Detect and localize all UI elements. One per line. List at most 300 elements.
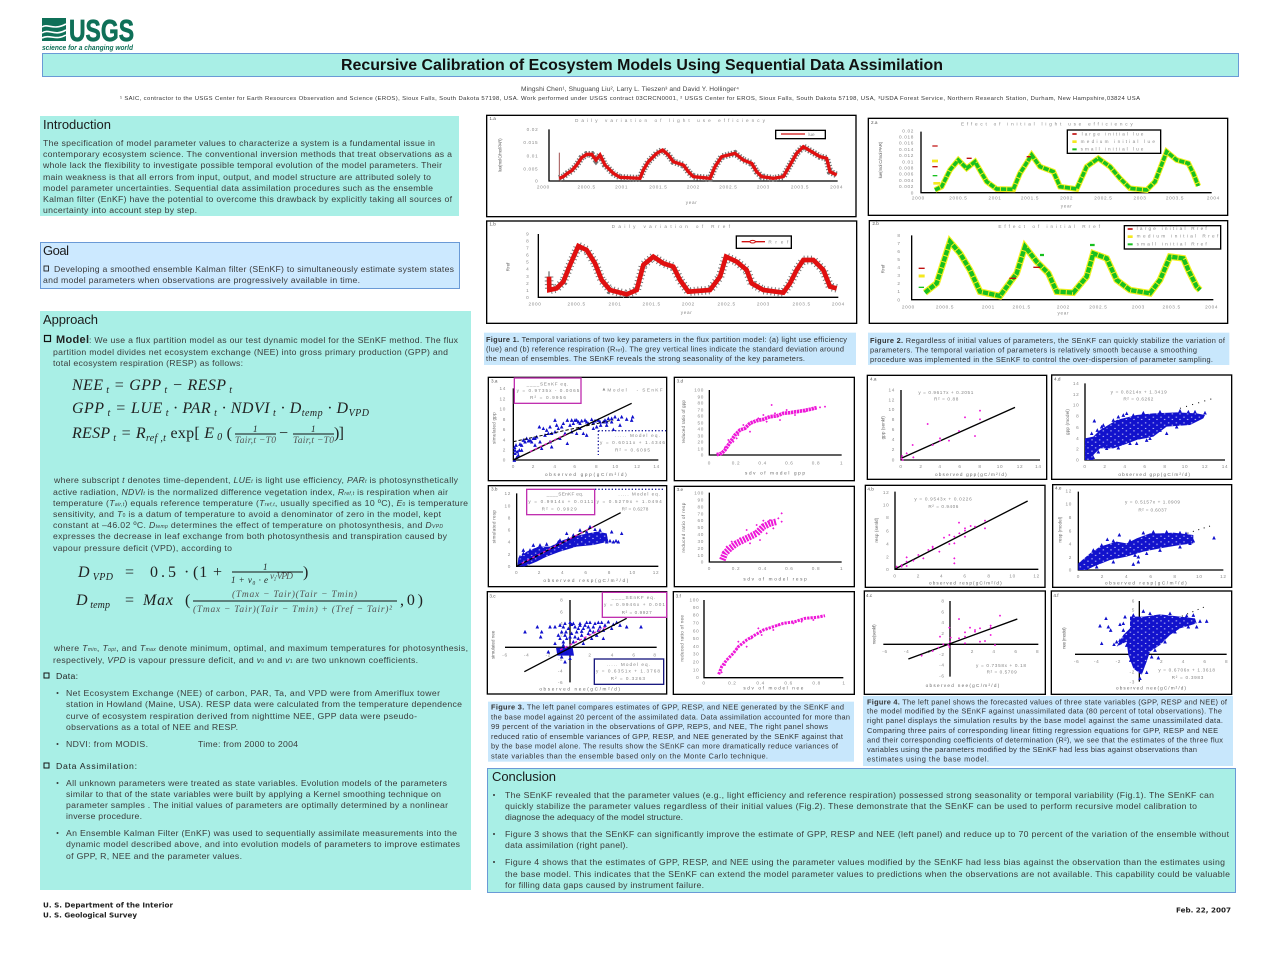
chart: 2.a effect of initial light use efficiency: 0.01 <box>902 159 914 164</box>
formula: flux partition equations: GPP <box>72 400 104 417</box>
footer: agency names: U. S. Geological Survey <box>43 910 137 920</box>
chart: 3.e reduced ratio of resp: 0.2 <box>732 566 740 571</box>
panel: approach <box>40 311 471 890</box>
chart: 3.a simulated vs observed gpp: simulated gpp <box>492 412 497 444</box>
chart: 1.b daily variation of Rref: 2 <box>526 281 529 286</box>
chart: 3.a simulated vs observed gpp <box>488 377 667 481</box>
text block: introduction body: whole lack the flexibility to investigate possible temporal evolution of the model parameters. Their <box>42 160 442 170</box>
chart: 3.a simulated vs observed gpp: ▲ <box>602 387 606 392</box>
chart: 3.b simulated vs observed resp: 10 <box>629 570 636 575</box>
chart: 3.a simulated vs observed gpp: 6 <box>573 464 577 469</box>
formula: D_VPD and D_temp: temp <box>88 600 110 611</box>
chart: 3.a simulated vs observed gpp: 14 <box>499 386 506 391</box>
chart: 4.c nee senkf vs observed: -2 <box>939 652 945 657</box>
chart: 3.f reduced ratio of nee: 70 <box>693 621 699 626</box>
chart: 4.d gpp model vs observed: observed gpp(gC/m²/d) <box>1118 472 1190 477</box>
formula: D_VPD and D_temp: 1 <box>263 562 268 572</box>
chart: 4.c nee senkf vs observed: 8 <box>941 599 945 604</box>
chart: 2.b effect of initial Rref: Effect of initial Rref <box>998 224 1101 229</box>
chart: 4.d gpp model vs observed: 4.d <box>1054 376 1061 381</box>
chart: 4.c nee senkf vs observed: -4 <box>939 663 945 668</box>
text block: data assimilation: All unknown parameters were treated as state variables. Evolution models of the parameters <box>66 778 448 788</box>
chart: 1.a daily variation of light use efficiency: 0.02 <box>527 127 538 132</box>
caption: figure 4: Comparing three pairs of corresponding linear fitting regression equations for GPP, RESP and NEE <box>867 726 1218 735</box>
chart: 4.b resp senkf vs observed: 4 <box>886 542 889 547</box>
chart: 3.f reduced ratio of nee: 0.6 <box>784 680 793 685</box>
formula: flux partition equations: − <box>279 425 288 442</box>
text block: introduction body: contemporary ecosystem science. The conventional inversion methods that treat observations as a <box>43 149 452 159</box>
chart: 1.a daily variation of light use efficiency: 0.015 <box>523 140 538 145</box>
chart: 3.a simulated vs observed gpp: R² = 0.6095 <box>615 447 650 452</box>
text block: conclusion bullets: the base model. This indicates that the SEnKF can extend the model parameter values to predictions when the observations are not available. This capability could be valuable <box>505 869 1230 879</box>
formula: D_VPD and D_temp: 1 + v₀ · e <box>231 575 268 585</box>
chart: 4.d gpp model vs observed: R² = 0.6262 <box>1123 397 1154 402</box>
chart: 4.b resp senkf vs observed: 10 <box>883 503 889 508</box>
chart: 1.b daily variation of Rref: 2001.5 <box>643 302 661 307</box>
caption: figure 3: state variables than the ensemble based only on the Monte Carlo technique. <box>491 751 768 760</box>
chart: 2.a effect of initial light use efficiency: 2000 <box>912 195 925 200</box>
chart: 2.a effect of initial light use efficiency: lue(mol C/mol PAR) <box>878 141 883 178</box>
chart: 2.a effect of initial light use efficiency: 0.02 <box>902 128 914 133</box>
formula: flux partition equations: t <box>105 408 111 419</box>
chart: 3.b simulated vs observed resp: 2 <box>508 552 511 557</box>
chart: 4.f nee model vs observed: -4 <box>1094 659 1099 664</box>
chart: 4.e resp model vs observed: 2 <box>1069 555 1072 560</box>
chart: 3.c simulated vs observed nee: -4 <box>558 669 563 674</box>
chart: 4.b resp senkf vs observed: 6 <box>886 528 889 533</box>
chart: 3.e reduced ratio of resp: sdv of model resp <box>743 577 807 582</box>
chart: 3.d reduced ratio of gpp: 0.2 <box>732 461 740 466</box>
chart: 1.a daily variation of light use efficiency: 2003.5 <box>791 185 809 190</box>
chart: 4.a gpp senkf vs observed: 14 <box>1035 464 1042 469</box>
chart: 1.a daily variation of light use efficiency: 2000.5 <box>578 185 596 190</box>
caption: figure 2 <box>868 333 1229 365</box>
formula: flux partition equations: t <box>110 433 116 444</box>
chart: 1.b daily variation of Rref: Rref <box>768 239 789 244</box>
caption: figure 2: Figure 2. Regardless of initial values of parameters, the SEnKF can quickly stabilize the variation of <box>870 336 1226 345</box>
chart: 4.d gpp model vs observed: 4 <box>1076 436 1079 441</box>
caption: figure 1: (lue) and (b) reference respiration (Rref). The grey vertical lines indicate the standard deviation around <box>486 344 844 353</box>
chart: 4.f nee model vs observed <box>1051 591 1232 694</box>
chart: 4.c nee senkf vs observed: -4 <box>904 649 909 654</box>
chart: 4.a gpp senkf vs observed: 8 <box>892 417 895 422</box>
chart: 4.d gpp model vs observed: 14 <box>1222 464 1228 469</box>
chart: 1.b daily variation of Rref: 2001 <box>608 302 622 307</box>
formula: D_VPD and D_temp: = <box>125 564 134 581</box>
text block: data: observations as a total of NEE and RESP. <box>66 722 238 732</box>
chart: 1.a daily variation of light use efficiency: Daily variation of light use efficiency <box>575 118 766 123</box>
text block: data assimilation: parameter samples . The initial values of parameters are optimally determined by a nonlinear <box>66 800 448 810</box>
chart: 2.a effect of initial light use efficiency: small initial lue <box>1081 147 1144 152</box>
text block: data: Time: from 2000 to 2004 <box>198 739 298 749</box>
chart: 2.a effect of initial light use efficiency: 0.002 <box>899 184 914 189</box>
chart: 4.a gpp senkf vs observed: 10 <box>888 407 895 412</box>
chart: 3.a simulated vs observed gpp: 4 <box>503 437 506 442</box>
chart: 3.a simulated vs observed gpp: 12 <box>634 464 641 469</box>
chart: 3.a simulated vs observed gpp: 2 <box>532 464 535 469</box>
formula: D_VPD and D_temp: (Tmax − Tair)(Tair − Tmin) <box>232 589 357 600</box>
panel: goal <box>40 242 460 288</box>
title bar: Recursive Calibration of Ecosystem Models Using Sequential Data Assimilation <box>341 57 943 74</box>
text block: introduction body: Kalman filter (EnKF) have the potential to overcome this drawback by explicitly taking all sources of <box>43 194 453 204</box>
chart: 4.f nee model vs observed: 4.f <box>1053 593 1059 598</box>
chart: 3.e reduced ratio of resp: 90 <box>697 497 704 502</box>
chart: 4.e resp model vs observed: 12 <box>1065 489 1072 494</box>
chart: 3.b simulated vs observed resp: R² = 0.9929 <box>542 506 577 511</box>
chart: 4.a gpp senkf vs observed: observed gpp(gC/m²/d) <box>935 472 1007 477</box>
formula: flux partition equations: t <box>226 385 232 396</box>
chart: 3.a simulated vs observed gpp: 10 <box>499 407 506 412</box>
footer: date: Feb. 22, 2007 <box>1176 906 1231 914</box>
chart: 3.e reduced ratio of resp: 20 <box>697 546 704 551</box>
chart: 3.c simulated vs observed nee: 6 <box>560 609 563 614</box>
chart: 4.f nee model vs observed: observed nee(gC/m²/d) <box>1116 686 1186 691</box>
chart: 3.e reduced ratio of resp: 60 <box>697 518 704 523</box>
chart: 3.c simulated vs observed nee: 2 <box>560 633 563 638</box>
chart: 1.a daily variation of light use efficiency: 0.01 <box>527 153 538 158</box>
chart: 1.a daily variation of light use efficiency: year <box>686 200 698 205</box>
formula: D_VPD and D_temp <box>75 562 423 615</box>
chart: 2.a effect of initial light use efficiency: 2002 <box>1060 195 1073 200</box>
chart: 3.b simulated vs observed resp: 0 <box>515 570 518 575</box>
caption: figure 4: right panel displays the simulation results by the base model against the same unassimilated data. <box>867 716 1223 725</box>
chart: 4.d gpp model vs observed: gpp (model) <box>1065 409 1070 435</box>
chart: 4.f nee model vs observed: 8 <box>1225 659 1228 664</box>
chart: 1.b daily variation of Rref: 2002 <box>682 302 695 307</box>
chart: 4.f nee model vs observed: 5 <box>1132 608 1135 613</box>
chart: 1.a daily variation of light use efficiency: 2002 <box>687 185 700 190</box>
chart: 4.d gpp model vs observed: 14 <box>1073 381 1079 386</box>
text block: conclusion bullets: Figure 4 shows that the estimates of GPP, RESP, and NEE using the parameter values modified by the SEnKF had less bias against the observation than the estimates using <box>505 857 1225 867</box>
chart: 3.a simulated vs observed gpp: 4 <box>553 464 557 469</box>
chart: 3.b simulated vs observed resp: 10 <box>504 503 511 508</box>
chart: 3.c simulated vs observed nee: y = 0.9946x + 0.001 <box>604 602 665 607</box>
chart: 3.c simulated vs observed nee: 8 <box>560 598 563 603</box>
chart: 4.a gpp senkf vs observed <box>867 375 1047 479</box>
chart: 3.b simulated vs observed resp: y = 0.9914x + 0.0111 <box>528 499 594 504</box>
chart: 3.c simulated vs observed nee: 2 <box>588 652 592 657</box>
chart: 3.b simulated vs observed resp: ..... Model eq. <box>618 491 660 496</box>
chart: 3.b simulated vs observed resp: 0 <box>508 564 511 569</box>
chart: 3.c simulated vs observed nee: 8 <box>653 652 657 657</box>
chart: 4.d gpp model vs observed <box>1052 375 1232 479</box>
chart: 4.a gpp senkf vs observed: 10 <box>997 464 1003 469</box>
chart: 4.e resp model vs observed: 4 <box>1125 574 1128 579</box>
heading: approach: Approach <box>43 312 98 327</box>
chart: 1.b daily variation of Rref: 0 <box>526 295 529 300</box>
chart: 4.b resp senkf vs observed: 2 <box>917 573 920 578</box>
text block: introduction body: main weakness is that all errors from input, output, and model structure are attributed solely to <box>43 172 431 182</box>
chart: 1.a daily variation of light use efficiency: 0 <box>535 179 538 184</box>
text block: model description: : We use a flux partition model as our test dynamic model for the SEnKF method. The flux <box>89 335 459 345</box>
chart: 1.a daily variation of light use efficiency <box>487 115 856 217</box>
text block: data: station in Howland (Maine, USA). RESP data were calculated from the temperature dependence <box>66 699 462 709</box>
chart: 3.f reduced ratio of nee: 0 <box>702 680 706 685</box>
chart: 3.b simulated vs observed resp: 12 <box>653 570 659 575</box>
chart: 3.c simulated vs observed nee: 3.c <box>489 593 496 598</box>
chart: 1.a daily variation of light use efficiency: lue(mol C/mol PAR) <box>497 138 502 172</box>
formula: flux partition equations: RESP <box>72 425 110 442</box>
text block: data assimilation: An Ensemble Kalman Filter (EnKF) was used to sequentially assimilate measurements into the <box>66 828 457 838</box>
text block: variable definitions <box>53 475 468 553</box>
chart: 3.a simulated vs observed gpp: 10 <box>612 464 619 469</box>
formula: D_VPD and D_temp: · <box>184 564 189 581</box>
caption: figure 2: procedure was implemented in the SEnKF to control the over-dispersion of parameter sampling. <box>870 355 1213 364</box>
caption: figure 4: and their corresponding coefficients of determination (R²), we see that the estimates of the three flux <box>867 735 1223 744</box>
chart: 3.b simulated vs observed resp: simulated resp <box>492 510 497 543</box>
chart: 4.b resp senkf vs observed: 8 <box>886 515 889 520</box>
formula: flux partition equations: − RESP <box>168 377 226 394</box>
chart: 3.e reduced ratio of resp <box>674 486 854 587</box>
formula: flux partition equations: t <box>270 408 276 419</box>
formula: flux partition equations: VPD <box>349 408 370 419</box>
caption: figure 2: parameters. The temporal variation of parameters is relatively smooth because a smoothing <box>870 345 1197 354</box>
chart: 2.b effect of initial Rref: 0 <box>897 297 901 302</box>
formula: flux partition equations: · NDVI <box>217 400 270 417</box>
chart: 4.f nee model vs observed: 2 <box>1132 634 1135 639</box>
chart: 4.f nee model vs observed: R² = 0.3983 <box>1172 675 1204 680</box>
chart: 2.a effect of initial light use efficiency: 0.016 <box>899 141 914 146</box>
text block: data <box>44 671 462 749</box>
chart: 2.b effect of initial Rref: year <box>1057 310 1069 315</box>
chart: 2.b effect of initial Rref: 4 <box>897 265 901 270</box>
formula: flux partition equations: = R <box>116 425 146 442</box>
chart: 3.d reduced ratio of gpp: 0 <box>701 453 704 458</box>
chart: 3.d reduced ratio of gpp: sdv of model gpp <box>745 471 805 476</box>
chart: 4.e resp model vs observed: 0 <box>1077 574 1080 579</box>
chart: 2.b effect of initial Rref: 2 <box>897 281 901 286</box>
formula: D_VPD and D_temp: D <box>78 564 90 581</box>
chart: 2.a effect of initial light use efficiency: 0.004 <box>899 178 914 183</box>
chart: 3.a simulated vs observed gpp: - SEnKF <box>637 387 663 392</box>
chart: 4.b resp senkf vs observed: observed resp(gC/m²/d) <box>929 580 1002 585</box>
chart: 3.c simulated vs observed nee: ____SEnKF eq. <box>611 595 655 600</box>
formula: flux partition equations: t <box>163 408 169 419</box>
chart: 4.a gpp senkf vs observed: gpp (senkf) <box>880 416 885 439</box>
chart: 3.e reduced ratio of resp: 70 <box>697 511 704 516</box>
chart: 4.b resp senkf vs observed: 0 <box>893 573 897 578</box>
chart: 2.b effect of initial Rref: 2003.5 <box>1163 304 1181 309</box>
chart: 4.e resp model vs observed: resp (model) <box>1058 516 1063 543</box>
chart: 4.e resp model vs observed: 4 <box>1069 542 1072 547</box>
text block: conclusion bullets <box>493 790 1230 890</box>
chart: 4.f nee model vs observed: -2 <box>1116 659 1121 664</box>
chart: 4.b resp senkf vs observed: 6 <box>963 573 967 578</box>
chart: 4.c nee senkf vs observed: 6 <box>941 609 945 614</box>
chart: 4.a gpp senkf vs observed: 0 <box>892 458 895 463</box>
chart: 4.b resp senkf vs observed: 0 <box>886 567 889 572</box>
chart: 1.b daily variation of Rref: 2000 <box>528 302 542 307</box>
formula: flux partition equations: 0 <box>214 432 222 443</box>
text block: goal body: and model parameters when observations are progressively available in time. <box>43 275 360 285</box>
title bar <box>42 54 1238 76</box>
chart: 2.b effect of initial Rref: 5 <box>897 257 901 262</box>
chart: 2.b effect of initial Rref: 2002 <box>1057 304 1070 309</box>
chart: 3.d reduced ratio of gpp: 80 <box>697 401 704 406</box>
chart: 4.b resp senkf vs observed: 4.b <box>867 486 874 491</box>
chart: 4.a gpp senkf vs observed: R² = 0.88 <box>934 397 959 402</box>
chart: 4.f nee model vs observed: -6 <box>1074 659 1079 664</box>
formula: flux partition equations: temp <box>302 408 323 419</box>
chart: 4.c nee senkf vs observed: -6 <box>939 673 945 678</box>
chart: 4.c nee senkf vs observed: 4 <box>941 620 945 625</box>
chart: 4.b resp senkf vs observed: y = 0.9543x + 0.0226 <box>914 497 972 502</box>
chart: 2.a effect of initial light use efficiency: 0.014 <box>899 147 914 152</box>
chart: 2.a effect of initial light use efficiency: year <box>1061 203 1073 208</box>
chart: 2.a effect of initial light use efficiency: Effect of initial light use efficiency <box>961 121 1133 126</box>
formula: D_VPD and D_temp: (1 + <box>193 564 222 581</box>
chart: 3.f reduced ratio of nee: 80 <box>693 613 699 618</box>
formula: flux partition equations <box>71 377 370 446</box>
chart: 1.a daily variation of light use efficiency: 2000 <box>537 185 550 190</box>
logo: USGS: science for a changing world <box>42 43 133 52</box>
chart: 1.b daily variation of Rref: 1.b <box>489 221 496 226</box>
chart: 3.a simulated vs observed gpp: observed gpp(gC/m²/d) <box>545 472 627 477</box>
text block: model description: total ecosystem respiration (RESP) as follows: <box>53 358 243 368</box>
chart: 4.b resp senkf vs observed: 12 <box>883 490 889 495</box>
chart: 3.a simulated vs observed gpp: 14 <box>653 464 660 469</box>
caption: figure 3: reduced ratio of ensemble variances of GPP, RESP, and NEE generated by the SEnKF against that <box>491 732 843 741</box>
chart: 3.f reduced ratio of nee: 90 <box>693 605 699 610</box>
chart: 4.d gpp model vs observed: 12 <box>1073 392 1079 397</box>
text block: coefficient definitions: where Tmin, Topt, and Tmax denote minimum, optimal, and maximum temperatures for photosynthesis, <box>53 643 468 653</box>
chart: 3.f reduced ratio of nee: 0 <box>696 675 699 680</box>
caption: figure 3: by the base model alone. The results show the SEnKF can more dramatically reduce variances of <box>491 741 839 750</box>
chart: 3.c simulated vs observed nee: 6 <box>632 652 636 657</box>
formula: flux partition equations: E <box>204 425 214 442</box>
chart: 4.a gpp senkf vs observed: 4 <box>892 437 895 442</box>
chart: 2.a effect of initial light use efficiency: 0 <box>911 190 914 195</box>
chart: 3.b simulated vs observed resp: 8 <box>608 570 611 575</box>
text block: coefficient definitions: respectively, VPD is vapour pressure deficit, and v0 and v1 are two unknown coefficients. <box>53 655 418 665</box>
chart: 2.a effect of initial light use efficiency: 2001 <box>988 195 1002 200</box>
chart: 4.d gpp model vs observed: 4 <box>1123 464 1127 469</box>
chart: 4.d gpp model vs observed: 10 <box>1182 464 1188 469</box>
chart: 3.f reduced ratio of nee <box>673 592 854 694</box>
text block: data assimilation: Data Assimilation: <box>56 761 137 771</box>
chart: 4.a gpp senkf vs observed: 4.a <box>870 377 877 382</box>
authors and affiliations <box>120 86 1140 102</box>
chart: 4.a gpp senkf vs observed: 2 <box>919 464 923 469</box>
caption: figure 1 <box>484 333 856 365</box>
chart: 3.e reduced ratio of resp: 0.4 <box>758 566 767 571</box>
chart: 1.b daily variation of Rref: Daily variation of Rref <box>612 224 731 229</box>
chart: 4.e resp model vs observed <box>1053 485 1232 587</box>
chart: 4.c nee senkf vs observed: 4.c <box>866 593 873 598</box>
chart: 4.d gpp model vs observed: 10 <box>1073 403 1079 408</box>
chart: 3.e reduced ratio of resp: 40 <box>697 532 704 537</box>
chart: 4.d gpp model vs observed: 8 <box>1076 414 1079 419</box>
chart: 1.b daily variation of Rref: 2004 <box>832 302 845 307</box>
formula: flux partition equations: t <box>162 385 167 396</box>
chart: 3.e reduced ratio of resp: 0.8 <box>812 566 820 571</box>
chart: 1.b daily variation of Rref: 9 <box>526 232 529 237</box>
chart: 2.b effect of initial Rref: Rref <box>881 264 886 273</box>
chart: 3.a simulated vs observed gpp: 0 <box>503 458 506 463</box>
formula: D_VPD and D_temp: D <box>76 592 88 609</box>
chart: 2.a effect of initial light use efficiency: 0.018 <box>899 135 914 140</box>
chart: 3.c simulated vs observed nee: R² = 0.3263 <box>611 676 645 681</box>
chart: 4.e resp model vs observed: 0 <box>1069 568 1072 573</box>
text block: conclusion bullets: quickly stabilize the parameter values regardless of their initial values (Fig.2). These demonstrate that the SEnKF can be used to perform recursive model calibration to <box>505 801 1197 811</box>
chart: 3.d reduced ratio of gpp: 70 <box>697 407 704 412</box>
chart: 3.d reduced ratio of gpp: 30 <box>697 433 704 438</box>
chart: 3.a simulated vs observed gpp: R² = 0.9956 <box>530 395 566 400</box>
chart: 3.a simulated vs observed gpp: y = 0.6011x + 1.4346 <box>600 440 665 445</box>
chart: 2.b effect of initial Rref: 2004 <box>1205 304 1218 309</box>
chart: 3.b simulated vs observed resp: 4 <box>561 570 564 575</box>
chart: 3.d reduced ratio of gpp: 50 <box>697 420 704 425</box>
chart: 4.e resp model vs observed: 4.e <box>1055 486 1062 491</box>
chart: 3.f reduced ratio of nee: reduced ratio of nee <box>679 615 684 662</box>
chart: 4.b resp senkf vs observed: resp (senkf) <box>874 517 879 543</box>
chart: 3.a simulated vs observed gpp: ____SEnKF eq. <box>526 381 568 386</box>
chart: 3.e reduced ratio of resp: 100 <box>694 490 704 495</box>
chart: 3.d reduced ratio of gpp: 1 <box>840 461 843 466</box>
chart: 3.a simulated vs observed gpp: 6 <box>503 427 506 432</box>
chart: 2.b effect of initial Rref: 2002.5 <box>1089 304 1107 309</box>
text block: introduction body: uncertainty into account step by step. <box>43 205 197 215</box>
chart: 4.a gpp senkf vs observed: 12 <box>888 398 895 403</box>
formula: flux partition equations: 1 <box>253 424 258 434</box>
formula: flux partition equations: · D <box>276 400 302 417</box>
chart: 1.a daily variation of light use efficiency: 0.005 <box>523 166 538 171</box>
chart: 3.b simulated vs observed resp: 12 <box>504 491 511 496</box>
chart: 3.c simulated vs observed nee: R² = 0.9927 <box>622 610 652 615</box>
chart: 2.b effect of initial Rref: large initial Rref <box>1137 226 1207 231</box>
chart: 4.e resp model vs observed: 2 <box>1101 574 1104 579</box>
text block: model description: partition model divides net ecosystem exchange (NEE) into gross primary production (GPP) and <box>53 347 448 357</box>
footer: agency names: U. S. Department of the Interior <box>43 900 173 910</box>
logo: USGS: USGS <box>69 13 134 48</box>
text block: model description: Model <box>56 334 89 346</box>
chart: 4.c nee senkf vs observed: -6 <box>882 649 888 654</box>
chart: 3.c simulated vs observed nee: -2 <box>546 652 551 657</box>
heading: introduction: Introduction <box>43 117 111 132</box>
text block: data assimilation: inverse procedure. <box>66 811 142 821</box>
chart: 2.b effect of initial Rref: small initial Rref <box>1137 241 1207 246</box>
chart: 3.e reduced ratio of resp: 30 <box>697 539 704 544</box>
chart: 3.d reduced ratio of gpp: 20 <box>697 440 704 445</box>
chart: 3.d reduced ratio of gpp: 90 <box>697 394 704 399</box>
chart: 4.b resp senkf vs observed: 4 <box>940 573 943 578</box>
authors and affiliations: ¹ SAIC, contractor to the USGS Center for Earth Resources Observation and Science (EROS), Sioux Falls, South Dakota 57198, USA. Work performed under USGS contract 03CRCN0001, ² USGS Center for EROS, Sioux Falls, South Dakota 57198, USA, ³USDA Forest Service, Northern Research Station, Durham, New Hampshire,03824 USA <box>120 96 1140 102</box>
chart: 1.b daily variation of Rref: Rref <box>505 262 510 271</box>
chart: 3.b simulated vs observed resp: 6 <box>584 570 588 575</box>
caption: figure 3 <box>488 702 854 762</box>
chart: 3.d reduced ratio of gpp: reduced ratio of gpp <box>681 400 686 443</box>
chart: 3.f reduced ratio of nee: 60 <box>693 628 699 633</box>
chart: 4.a gpp senkf vs observed: 8 <box>978 464 982 469</box>
caption: figure 4: estimates using the base model. <box>867 754 989 763</box>
chart: 3.f reduced ratio of nee: 20 <box>693 659 699 664</box>
chart: 2.a effect of initial light use efficiency: 2001.5 <box>1021 195 1039 200</box>
chart: 4.d gpp model vs observed: 0 <box>1076 458 1079 463</box>
chart: 2.a effect of initial light use efficiency: 2.a <box>871 120 878 125</box>
chart: 4.a gpp senkf vs observed: 12 <box>1017 464 1023 469</box>
chart: 4.f nee model vs observed: 6 <box>1132 599 1135 604</box>
chart: 2.a effect of initial light use efficiency: 2000.5 <box>949 195 967 200</box>
chart: 4.d gpp model vs observed: 6 <box>1143 464 1147 469</box>
text block: variable definitions: where subscript t denotes time-dependent, LUEt is light use efficiency, PARt is photosynsthetically <box>53 475 459 485</box>
caption: figure 3: 99 percent of the variation in the observations of GPP, REPS, and NEE, The right panel shows <box>491 722 828 731</box>
text block: conclusion bullets: Figure 3 shows that the SEnKF can significantly improve the estimate of GPP, RESP and NEE (left panel) and reduce up to 70 percent of the variation of the ensemble without <box>505 829 1230 839</box>
chart: 1.b daily variation of Rref: year <box>681 310 693 315</box>
chart: 4.e resp model vs observed: 10 <box>1065 502 1072 507</box>
chart: 1.a daily variation of light use efficiency: lue <box>808 132 815 137</box>
text block: variable definitions: temperature (Tair,t) equals reference temperature (Tref,t, usually specified as 10 ºC), E0 is temperature <box>53 498 468 508</box>
text block: data assimilation: similar to that of the state variables were built by applying a Kernel smoothing technique on <box>66 789 441 799</box>
